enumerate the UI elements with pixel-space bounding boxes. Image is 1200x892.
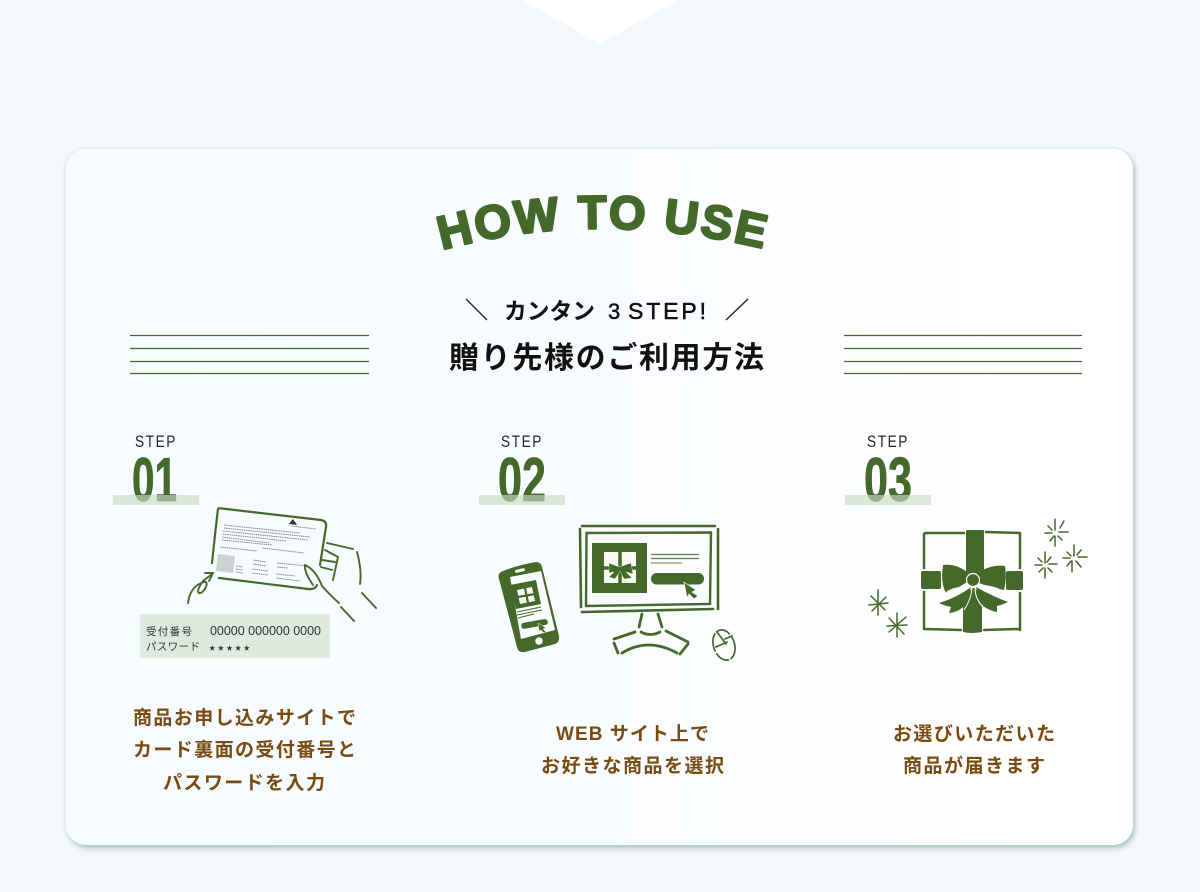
icon: phone	[498, 562, 559, 652]
text: step 02 description: WEB サイト上で	[556, 723, 709, 745]
text: step 03 description: お選びいただいた	[893, 723, 1055, 745]
icon: desktop monitor	[580, 526, 718, 654]
panel: how to use card	[66, 149, 1133, 845]
card fine print	[220, 525, 316, 581]
subheading: カンタン3STEP: カンタン	[504, 298, 595, 324]
step 02 label: 02	[498, 446, 546, 515]
icon: mouse	[709, 627, 739, 663]
subheading: カンタン3STEP	[466, 298, 748, 324]
step 02 label	[479, 432, 565, 515]
step 03 label: STEP	[867, 432, 909, 451]
card number box	[140, 614, 330, 658]
icon: card in hand	[188, 508, 376, 621]
text: step 03 description: 商品が届きます	[903, 754, 1045, 777]
text: step 02 description: お好きな商品を選択	[541, 755, 724, 777]
step 01 label	[113, 432, 199, 515]
card number box: 受付番号	[146, 625, 192, 638]
subheading: カンタン3STEP: 3	[608, 299, 620, 324]
right heading rules	[844, 336, 1082, 374]
step 03 label: 03	[864, 446, 912, 515]
heading: 贈り先様のご利用方法: 贈り先様のご利用方法	[449, 341, 764, 375]
card number box: パスワード	[146, 641, 200, 653]
card number box: 00000 000000 0000	[210, 624, 321, 638]
text: step 01 description: 商品お申し込みサイトで	[133, 707, 356, 729]
title: HOW TO USE: HOW TO USE	[436, 194, 768, 250]
top pointer triangle	[524, 0, 676, 44]
text: step 01 description	[133, 707, 356, 794]
text: step 01 description: カード裏面の受付番号と	[133, 738, 356, 761]
subheading: カンタン3STEP: STEP!	[628, 298, 706, 324]
step 01 label: 01	[132, 446, 177, 515]
step 02 label: STEP	[501, 432, 543, 451]
icon: sparkles	[869, 519, 1087, 637]
step 03 label	[845, 432, 931, 515]
step 01 label: STEP	[135, 432, 177, 451]
card number box: ★★★★★	[209, 645, 250, 652]
icon: gift box	[921, 530, 1023, 633]
text: step 02 description	[541, 723, 724, 777]
text: step 01 description: パスワードを入力	[163, 772, 325, 794]
left heading rules	[130, 336, 369, 374]
text: step 03 description	[893, 723, 1055, 777]
